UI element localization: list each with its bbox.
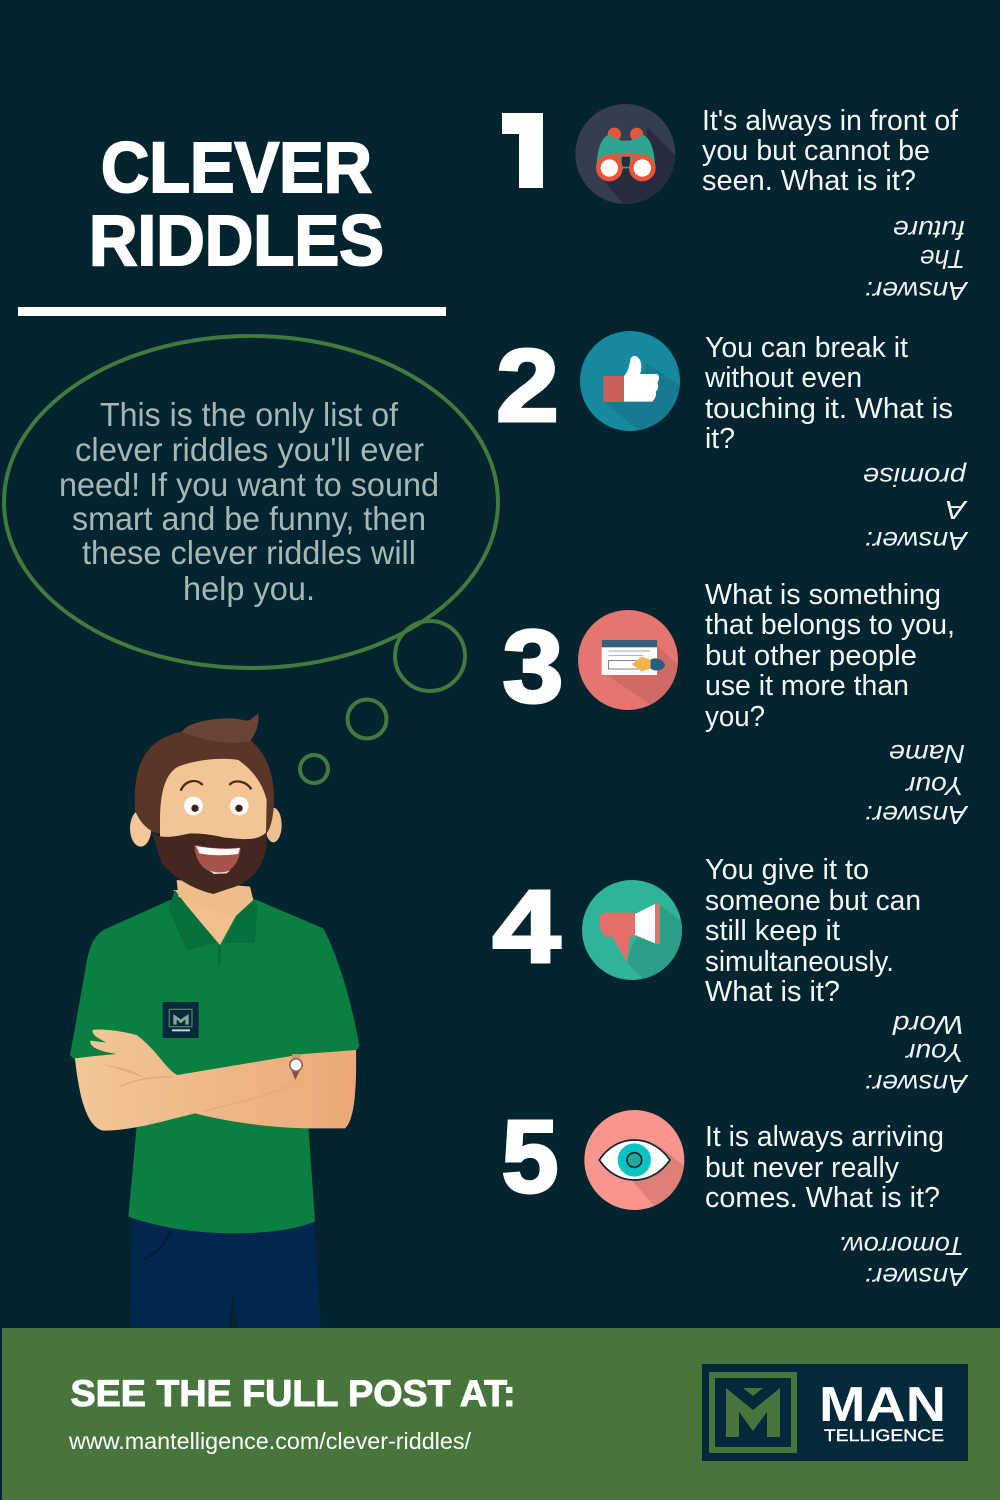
riddle 4: [492, 854, 969, 1099]
logo: MAN: [819, 1378, 946, 1432]
riddle text 3: use it more than: [705, 670, 909, 702]
riddle text 1: [702, 105, 959, 197]
riddle text 1: It's always in front of: [702, 105, 959, 137]
upside-down answer 3: Your: [905, 771, 964, 801]
upside-down answer 3: [865, 739, 969, 830]
riddle text 4: simultaneously.: [705, 946, 894, 978]
icon: eye: [584, 1110, 684, 1210]
upside-down answer 2: promise: [863, 462, 967, 492]
icon: binoculars: [575, 104, 676, 204]
riddle text 5: comes. What is it?: [705, 1182, 940, 1214]
upside-down answer 4: Word: [891, 1010, 964, 1040]
upside-down answer 1: future: [893, 215, 965, 245]
intro text: This is the only list of: [100, 396, 399, 433]
number 3: 3: [502, 609, 564, 724]
riddle text 1: you but cannot be: [702, 135, 930, 167]
riddle text 2: touching it. What is: [705, 393, 953, 425]
upside-down answer 2: [863, 462, 969, 556]
riddle text 4: [705, 854, 921, 1008]
number 2: 2: [496, 328, 559, 443]
number 1: 1: [503, 94, 555, 209]
intro text: [59, 396, 439, 607]
upside-down answer 3: Answer:: [865, 800, 969, 830]
upside-down answer 4: [865, 1010, 969, 1099]
upside-down answer 1: [865, 215, 969, 306]
upside-down answer 5: Answer:: [865, 1262, 969, 1292]
upside-down answer 1: The: [920, 244, 965, 274]
upside-down answer 4: Answer:: [865, 1069, 969, 1099]
upside-down answer 5: Tomorrow.: [838, 1231, 964, 1261]
riddle text 3: that belongs to you,: [705, 609, 955, 641]
riddle 3: [502, 579, 969, 830]
footer band: [2, 1328, 1000, 1500]
riddle 1: [502, 94, 969, 306]
riddle text 5: [705, 1121, 944, 1214]
intro text: help you.: [183, 570, 315, 607]
riddle text 3: [705, 579, 955, 733]
shirt badge: [163, 1002, 199, 1038]
upside-down answer 2: A: [945, 495, 968, 525]
intro text: these clever riddles will: [82, 534, 416, 571]
riddle text 4: still keep it: [705, 915, 840, 947]
riddle text 5: but never really: [705, 1152, 899, 1184]
upside-down answer 3: Name: [889, 739, 965, 769]
riddle text 2: it?: [705, 423, 735, 455]
upside-down answer 1: Answer:: [865, 276, 969, 306]
illustration: smiling bearded man with crossed arms: [70, 713, 359, 1327]
riddle text 2: [704, 332, 953, 455]
title: [89, 129, 384, 281]
number 5: 5: [502, 1099, 558, 1214]
intro text: need! If you want to sound: [59, 466, 439, 503]
riddle text 4: someone but can: [705, 885, 921, 917]
upside-down answer 5: [838, 1231, 969, 1292]
title: RIDDLES: [89, 202, 384, 281]
icon: check and pen: [578, 610, 678, 710]
footer url: www.mantelligence.com/clever-riddles/: [68, 1428, 472, 1454]
icon: thumbs up: [580, 331, 680, 431]
riddle text 2: You can break it: [705, 332, 908, 364]
riddle 5: [502, 1099, 969, 1292]
number 1: [502, 113, 543, 188]
riddle text 4: What is it?: [705, 976, 840, 1008]
intro text: smart and be funny, then: [72, 500, 426, 537]
riddle text 3: you?: [705, 701, 765, 733]
wristwatch: [289, 1054, 303, 1080]
icon: megaphone: [582, 880, 682, 980]
upside-down answer 2: Answer:: [865, 526, 969, 556]
upside-down answer 4: Your: [905, 1038, 964, 1068]
title: CLEVER: [101, 129, 372, 208]
man body: [70, 890, 359, 1327]
intro text: clever riddles you'll ever: [75, 431, 424, 468]
riddle text 4: You give it to: [705, 854, 869, 886]
riddle text 1: seen. What is it?: [702, 165, 916, 197]
number 4: 4: [492, 869, 560, 984]
logo: TELLIGENCE: [824, 1426, 944, 1445]
logo: [702, 1364, 968, 1461]
riddle 2: [496, 328, 969, 556]
footer heading: SEE THE FULL POST AT:: [70, 1373, 516, 1414]
riddle text 3: but other people: [705, 640, 917, 672]
riddle text 3: What is something: [705, 579, 941, 611]
thought bubble: [4, 336, 498, 783]
riddle text 5: It is always arriving: [705, 1121, 944, 1153]
riddle text 2: without even: [704, 362, 862, 394]
man head: [130, 713, 282, 918]
